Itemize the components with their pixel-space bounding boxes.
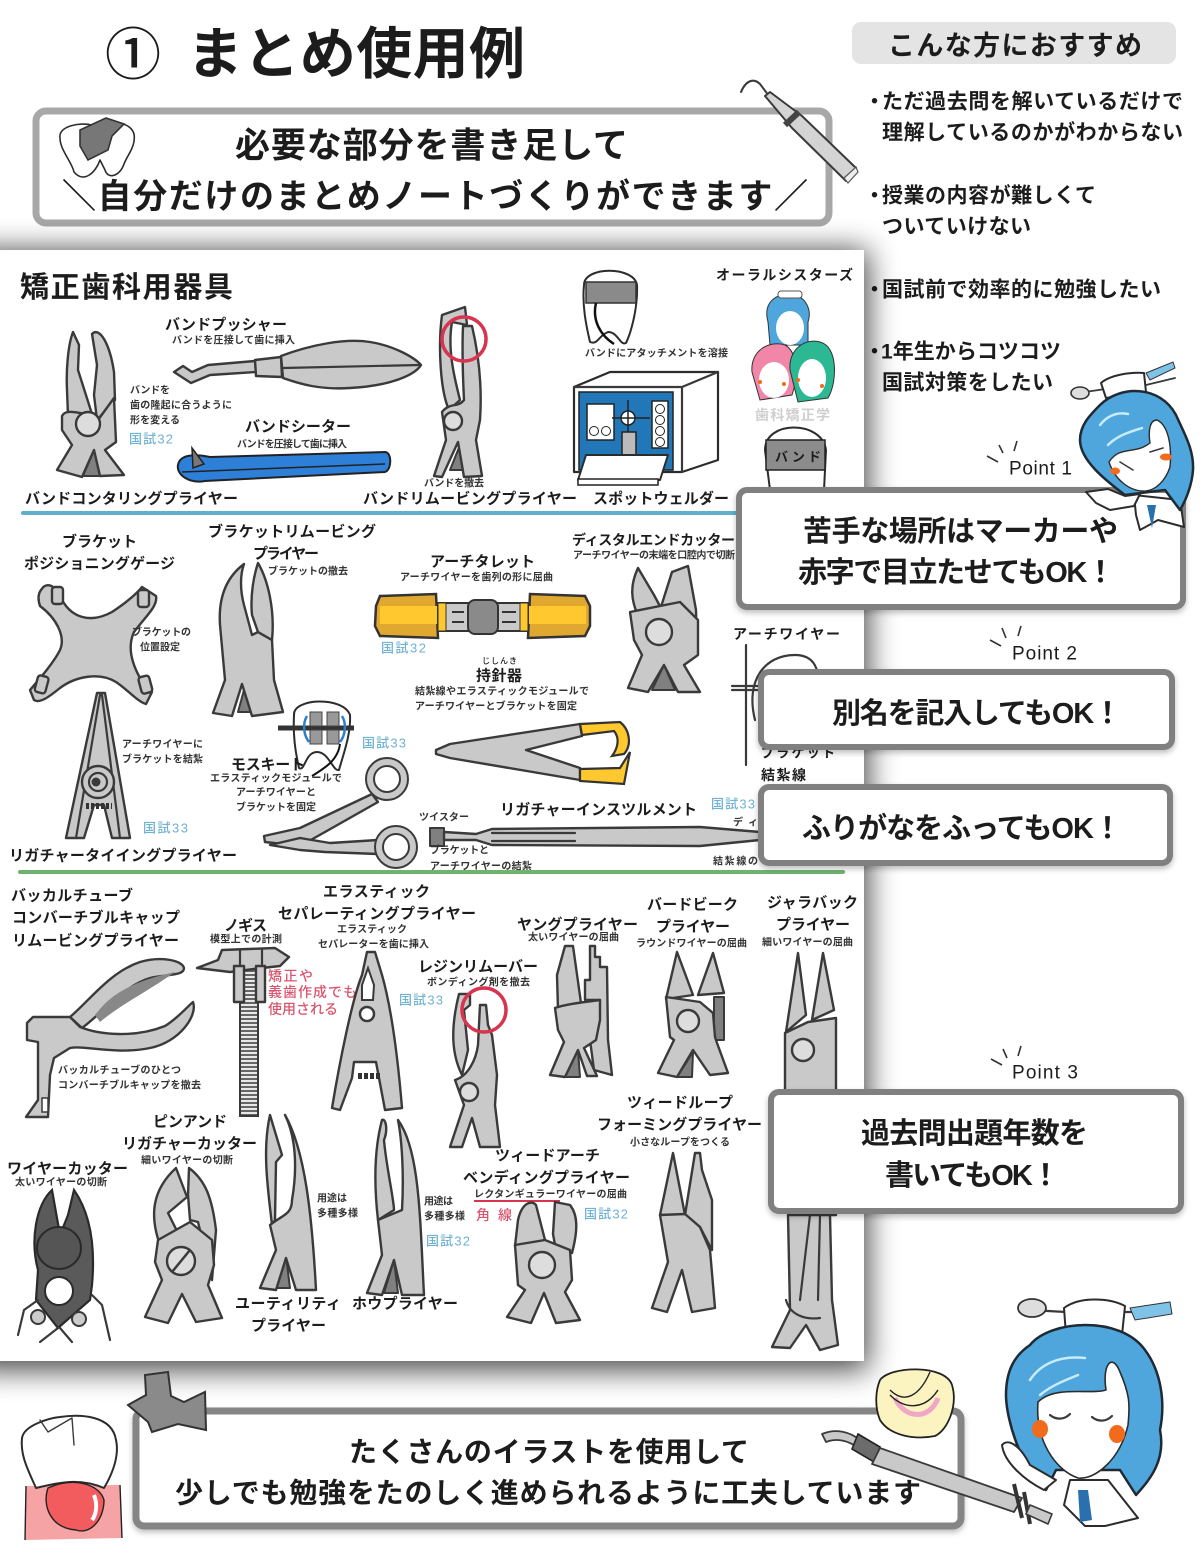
instrument: buccal tube cap removing pliers: コンバーチブルキャップ (12, 908, 180, 926)
label: point 3: Point 3 (1012, 1062, 1078, 1084)
instrument: bird beak pliers: プライヤー (656, 918, 730, 936)
instrument: bracket positioning gauge: 位置設定 (140, 640, 180, 654)
instrument: tweed arch bending pliers: 角線 (476, 1207, 512, 1223)
text: point 3 (861, 1117, 1088, 1192)
panel: furigana callout (761, 787, 1170, 863)
instrument: young pliers: 太いワイヤーの屈曲 (528, 930, 619, 944)
instrument: mosquito forceps: モスキート (231, 756, 305, 774)
illustration: character with scaler (1002, 1299, 1172, 1526)
instrument: spot welder (574, 372, 729, 508)
text block: recommendation list: ・ (864, 340, 885, 364)
instrument: resin remover: レジンリムーバー (418, 958, 538, 976)
instrument: tweed loop forming pliers (597, 1094, 762, 1312)
instrument: caliper (197, 918, 357, 1116)
label: point 1: Point 1 (1009, 458, 1072, 480)
text block: recommendation list: 1年生からコツコツ (881, 340, 1061, 364)
instrument: band pusher: バンドを圧接して歯に挿入 (172, 334, 295, 346)
heading: recommended: こんな方におすすめ (888, 31, 1142, 61)
icon: molar and gum (22, 1416, 122, 1540)
text block: recommendation list: ついていけない (882, 216, 1031, 238)
label: point 1 (987, 441, 1072, 480)
instrument: elastic separating pliers: セパレーティングプライヤー (278, 904, 476, 922)
icon: air scaler (822, 1431, 1052, 1524)
label: point 3 (991, 1046, 1078, 1084)
instrument: pin and ligature cutter (122, 1114, 257, 1323)
instrument: ligature instrument (419, 796, 760, 872)
headline text (62, 126, 808, 216)
text block: recommendation list (864, 90, 1183, 394)
text block: recommendation list: 国試対策をしたい (882, 372, 1053, 394)
instrument: buccal tube cap removing pliers (11, 886, 201, 1117)
instrument: needle holder (415, 656, 630, 784)
instrument: pin and ligature cutter: 細いワイヤーの切断 (141, 1154, 233, 1166)
instrument: buccal tube cap removing pliers: リムービングプライヤー (12, 932, 179, 950)
instrument: jarabak pliers: ジャラバック (767, 894, 858, 912)
instrument: tweed arch bending pliers: 国試32 (584, 1206, 628, 1222)
instrument: tweed loop forming pliers: フォーミングプライヤー (597, 1116, 762, 1134)
text block: recommendation list: ・ (864, 90, 885, 114)
instrument: how pliers (352, 1120, 470, 1312)
instrument: jarabak pliers: 細いワイヤーの屈曲 (762, 936, 853, 948)
text: point 1: 苦手な場所はマーカーや (803, 515, 1118, 548)
instrument: arch turret: 国試32 (381, 640, 426, 656)
instrument: needle holder: じしんき (482, 656, 517, 666)
instrument: pin and ligature cutter: ピンアンド (153, 1114, 227, 1130)
instrument: needle holder: 持針器 (476, 666, 522, 684)
instrument: ligature instrument: ツイスター (419, 812, 469, 824)
instrument: bracket positioning gauge: ブラケットの (132, 626, 191, 638)
instrument: band removing pliers: バンドを撤去 (424, 476, 484, 490)
instrument: tweed arch bending pliers: レクタンギュラーワイヤーの屈曲 (474, 1188, 627, 1200)
instrument: needle holder: アーチワイヤーとブラケットを固定 (415, 700, 577, 712)
instrument: mosquito forceps: アーチワイヤーと (236, 786, 316, 798)
instrument: jarabak pliers (762, 894, 858, 1350)
instrument: arch turret: アーチワイヤーを歯列の形に屈曲 (400, 570, 553, 584)
instrument: tooth with welded attachment: バンドにアタッチメントを溶接 (585, 346, 728, 360)
instrument: bird beak pliers: バードビーク (647, 896, 738, 914)
text block: recommendation list: 国試前で効率的に勉強したい (882, 278, 1161, 302)
instrument: band seater (178, 418, 390, 482)
panel: point 2 callout (761, 626, 1172, 747)
instrument: ligature instrument: 結紮線の (713, 854, 758, 868)
instrument: ligature instrument: ディ (733, 816, 758, 828)
icon: molar with filling (60, 118, 134, 177)
bottom message text (175, 1436, 921, 1508)
instrument: caliper: ノギス (224, 918, 267, 934)
instrument: needle holder: 結紮線やエラスティックモジュールで (415, 684, 589, 698)
instrument: buccal tube cap removing pliers: バッカルチューブのひとつ (58, 1064, 181, 1076)
instrument: bird beak pliers: ラウンドワイヤーの屈曲 (636, 936, 747, 950)
instrument: band seater: バンドシーター (245, 418, 351, 436)
instrument: bracket removing pliers: ブラケットの撤去 (268, 564, 348, 578)
instrument: arch wire diagram: アーチワイヤー (733, 626, 840, 642)
text block: recommendation list: ・ (864, 184, 885, 208)
instrument: young pliers: ヤングプライヤー (517, 916, 638, 934)
instrument: arch turret: アーチタレット (430, 554, 535, 570)
instrument: bracket removing pliers: プライヤー (253, 546, 319, 562)
illustration: oral sisters (716, 267, 853, 423)
instrument: distal end cutter: ディスタルエンドカッター (572, 532, 735, 548)
instrument: bracket positioning gauge (24, 532, 191, 704)
instrument: mosquito forceps: エラスティックモジュールで (210, 772, 342, 784)
instrument: ligature tying pliers: ブラケットを結紮 (122, 752, 203, 766)
illustration: oral sisters: 歯科矯正学 (755, 407, 830, 423)
instrument: ligature tying pliers: 国試33 (143, 820, 188, 836)
instrument: bracket removing pliers: ブラケットリムービング (208, 522, 376, 540)
illustration: tooth with bracket: 国試33 (362, 736, 406, 750)
instrument: wire cutter: 太いワイヤーの切断 (15, 1176, 107, 1188)
instrument: caliper: 模型上での計測 (210, 932, 282, 946)
instrument: young pliers (517, 916, 638, 1077)
panel: headline box (36, 81, 858, 223)
instrument: resin remover (418, 958, 538, 1147)
instrument: utility pliers: 多種多様 (317, 1206, 358, 1220)
instrument: tweed loop forming pliers: ツィードループ (627, 1094, 733, 1112)
instrument: elastic separating pliers (278, 884, 476, 1110)
text: point 3: 書いてもOK！ (885, 1159, 1060, 1192)
instrument: spot welder: スポットウェルダー (593, 490, 729, 508)
panel: recommended for (852, 22, 1183, 394)
instrument: utility pliers: プライヤー (251, 1318, 326, 1334)
instrument: band removing pliers: バンドリムービングプライヤー (363, 490, 577, 508)
text: point 1 (798, 515, 1118, 589)
instrument: wire cutter: ワイヤーカッター (7, 1160, 128, 1178)
bottom message text: 少しでも勉強をたのしく進められるように工夫しています (175, 1478, 921, 1508)
instrument: bracket removing pliers (208, 522, 376, 716)
instrument: ligature tying pliers: アーチワイヤーに (122, 738, 203, 750)
title: ① (105, 24, 161, 86)
instrument: tweed arch bending pliers: ツィードアーチ (495, 1148, 600, 1164)
panel: point 2 callout: 別名を記入してもOK！ (832, 697, 1122, 730)
instrument: mosquito forceps (210, 756, 417, 868)
title: まとめ使用例 (187, 22, 525, 86)
panel: bottom message (22, 1369, 1052, 1540)
instrument: elastic separating pliers: セパレーターを歯に挿入 (318, 938, 429, 950)
instrument: arch wire diagram (732, 626, 840, 783)
instrument: pin and ligature cutter: リガチャーカッター (122, 1136, 257, 1152)
instrument: utility pliers: 用途は (317, 1192, 347, 1204)
heading: recommended (852, 22, 1176, 64)
section: band instruments (23, 267, 853, 513)
instrument: caliper: 矯正や (268, 968, 313, 984)
instrument: buccal tube cap removing pliers: バッカルチューブ (11, 886, 133, 904)
instrument: elastic separating pliers: エラスティック (337, 924, 407, 936)
panel: point 1 callout (739, 441, 1183, 607)
text block: recommendation list: 理解しているのかがわからない (882, 120, 1183, 144)
instrument: band contouring pliers: バンドを (130, 384, 170, 396)
panel: paper sheet (0, 250, 868, 1370)
illustration: character pointing (1071, 362, 1193, 530)
instrument: band contouring pliers: 形を変える (130, 414, 180, 426)
instrument: caliper: 義歯作成でも (268, 984, 357, 1000)
instrument: how pliers: 国試32 (426, 1234, 470, 1248)
label: point 2: Point 2 (1012, 644, 1077, 664)
icon: scaler handpiece (741, 81, 858, 183)
instrument: caliper: 使用される (268, 1001, 338, 1017)
instrument: utility pliers (235, 1115, 358, 1334)
instrument: how pliers: 用途は (424, 1194, 453, 1208)
text block: recommendation list: ・ (864, 278, 885, 302)
label: point 2 (990, 626, 1077, 664)
text: point 1: 赤字で目立たせてもOK！ (798, 556, 1115, 589)
instrument: ligature instrument: 国試33 (711, 796, 755, 812)
instrument: bracket positioning gauge: ポジショニングゲージ (24, 554, 175, 572)
instrument: buccal tube cap removing pliers: コンバーチブルキャップを撤去 (58, 1078, 201, 1092)
instrument: tweed arch bending pliers: ベンディングプライヤー (463, 1168, 630, 1186)
illustration: oral sisters: オーラルシスターズ (716, 267, 853, 283)
instrument: band seater: バンドを圧接して歯に挿入 (237, 438, 347, 450)
text: point 3: 過去問出題年数を (861, 1117, 1088, 1150)
icon: gray crown (128, 1372, 206, 1432)
icon: yellow tooth cross-section (876, 1369, 954, 1437)
illustration: tooth with bracket (278, 701, 406, 776)
instrument: elastic separating pliers: 国試33 (399, 992, 443, 1008)
instrument: band pusher: バンドプッシャー (165, 316, 287, 334)
instrument: wire cutter (7, 1160, 128, 1342)
instrument: distal end cutter: アーチワイヤーの末端を口腔内で切断 (573, 548, 735, 562)
section: bracket instruments (9, 522, 843, 872)
instrument: distal end cutter (572, 532, 735, 692)
instrument: band contouring pliers: バンドコンタリングプライヤー (25, 490, 238, 508)
instrument: bracket positioning gauge: ブラケット (62, 532, 137, 550)
instrument: resin remover: ボンディング剤を撤去 (427, 976, 530, 988)
headline text: ＼自分だけのまとめノートづくりができます／ (62, 177, 808, 216)
instrument: ligature instrument: ブラケットと (430, 844, 489, 856)
text block: recommendation list: ただ過去問を解いているだけで (882, 90, 1183, 114)
instrument: arch wire diagram: 結紮線 (761, 767, 806, 783)
panel: furigana callout: ふりがなをふってもOK！ (802, 811, 1122, 845)
instrument: ligature tying pliers (9, 693, 237, 864)
instrument: tweed arch bending pliers (463, 1148, 630, 1323)
instrument: elastic separating pliers: エラスティック (323, 884, 430, 900)
headline text: 必要な部分を書き足して (235, 126, 628, 166)
instrument: how pliers: 多種多様 (424, 1210, 465, 1222)
bottom message text: たくさんのイラストを使用して (349, 1436, 749, 1468)
instrument: band pusher (165, 316, 421, 388)
instrument: ligature instrument: リガチャーインスツルメント (500, 802, 697, 818)
instrument: how pliers: ホウプライヤー (352, 1296, 458, 1312)
instrument: ligature instrument: アーチワイヤーの結紮 (430, 860, 532, 872)
illustration: band on tooth (765, 428, 826, 490)
text block: recommendation list: 授業の内容が難しくて (882, 184, 1096, 208)
instrument: band contouring pliers (25, 332, 238, 508)
instrument: tweed loop forming pliers: 小さなループをつくる (630, 1136, 730, 1148)
instrument: tooth with welded attachment (583, 271, 728, 360)
instrument: bird beak pliers (636, 896, 747, 1077)
instrument: utility pliers: ユーティリティ (235, 1296, 341, 1312)
instrument: ligature tying pliers: リガチャータイイングプライヤー (9, 846, 237, 864)
illustration: band on tooth: バンド (775, 450, 821, 464)
panel: point 3 callout (771, 1046, 1181, 1211)
instrument: arch turret (375, 554, 590, 656)
instrument: band contouring pliers: 歯の隆起に合うように (130, 398, 232, 412)
instrument: band removing pliers (363, 307, 577, 508)
instrument: band contouring pliers: 国試32 (129, 432, 173, 446)
heading: orthodontic instruments: 矯正歯科用器具 (20, 271, 233, 304)
section: wire and cap pliers (7, 884, 858, 1350)
instrument: jarabak pliers: プライヤー (776, 916, 850, 934)
instrument: arch wire diagram: ブラケット (761, 746, 835, 760)
instrument: mosquito forceps: ブラケットを固定 (236, 800, 316, 814)
